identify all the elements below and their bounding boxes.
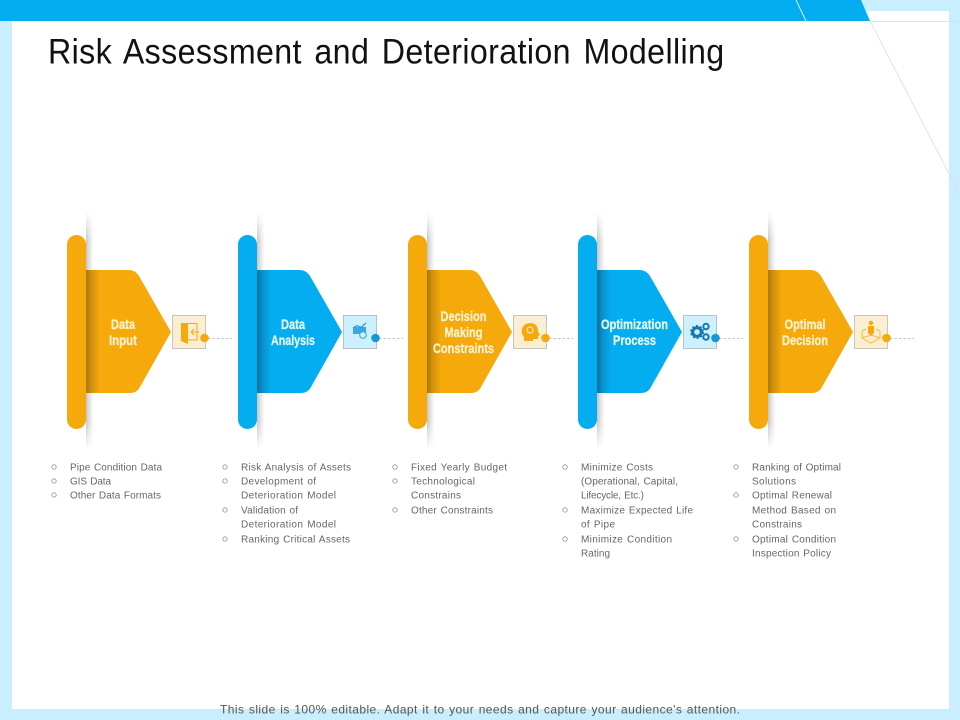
bullet list: optimization process: (Operational, Capital, [581, 476, 678, 488]
bullet list: decision making constraints: Other Constraints [411, 506, 493, 516]
bullet list: optimal decision: Optimal Renewal [752, 490, 832, 502]
footer note: This slide is 100% editable. Adapt it to your needs and capture your audience's attention. [220, 702, 740, 716]
bullet list: data input: Pipe Condition Data [70, 462, 162, 474]
bullet list: optimization process [563, 462, 693, 560]
bullet list: decision making constraints [393, 462, 507, 516]
bullet list: data analysis: Ranking Critical Assets [241, 534, 350, 546]
bullet list: optimization process: Rating [581, 548, 610, 560]
bullet list: optimal decision: Solutions [752, 476, 796, 488]
vertical bar [408, 235, 427, 429]
label: Constraints [433, 341, 494, 356]
label: Optimization [601, 317, 668, 332]
bullet list: optimal decision: Method Based on [752, 506, 836, 516]
bullet list: data analysis: Development of [241, 476, 316, 488]
vertical bar [578, 235, 597, 429]
bullet list: optimal decision [734, 462, 841, 560]
arrow shape: optimization [597, 270, 682, 393]
icon: chart analysis [344, 316, 376, 348]
step 4: optimization process [578, 212, 743, 450]
bullet list: decision making constraints: Fixed Yearly Budget [411, 462, 507, 474]
step 1: data input [67, 212, 232, 450]
label: Process [613, 333, 656, 348]
label: Data [281, 317, 305, 332]
bullet list: data analysis [223, 462, 351, 546]
label: Decision [440, 309, 486, 324]
header accent line [796, 0, 806, 21]
bullet list: data input: GIS Data [70, 476, 111, 488]
bullet list: optimization process: Minimize Costs [581, 462, 653, 474]
bullet list: data input: Other Data Formats [70, 490, 161, 502]
bullet list: data analysis: Deterioration Model [241, 520, 336, 530]
icon: head with gear [514, 316, 546, 348]
bullet list: optimization process: Lifecycle, Etc.) [581, 490, 644, 502]
bullet list: decision making constraints: Constrains [411, 490, 461, 502]
bullet list: optimization process: Minimize Condition [581, 534, 672, 546]
bullet list: data analysis: Deterioration Model [241, 490, 336, 502]
arrow shape: decision [427, 270, 512, 393]
icon: gears [684, 316, 716, 348]
arrow shape: data analysis [257, 270, 342, 393]
vertical bar [238, 235, 257, 429]
vertical bar [749, 235, 768, 429]
label: Making [444, 325, 482, 340]
connector [882, 334, 914, 342]
title: Risk Assessment and Deterioration Modelling [48, 33, 724, 72]
label: Analysis [271, 333, 315, 348]
top blue header band [0, 0, 870, 21]
header corner lines [869, 21, 960, 195]
connector [200, 334, 232, 342]
arrow shape: data input [86, 270, 171, 393]
connector [371, 334, 403, 342]
bullet list: decision making constraints: Technological [411, 476, 475, 488]
step 2: data analysis [238, 212, 403, 450]
connector [541, 334, 573, 342]
bullet list: data analysis: Risk Analysis of Assets [241, 462, 351, 474]
bullet list: data input [52, 462, 162, 502]
label: Data [111, 317, 135, 332]
vertical bar [67, 235, 86, 429]
label: Input [109, 333, 137, 348]
step 5: optimal decision [749, 212, 914, 450]
connector [711, 334, 743, 342]
bullet list: optimal decision: Optimal Condition [752, 534, 836, 546]
bullet list: optimal decision: Ranking of Optimal [752, 462, 841, 474]
label: Decision [782, 333, 828, 348]
bullet list: data analysis: Validation of [241, 506, 298, 516]
bullet list: optimal decision: Constrains [752, 520, 802, 530]
label: Optimal [784, 317, 826, 332]
bullet list: optimal decision: Inspection Policy [752, 548, 831, 560]
icon: door [172, 316, 206, 348]
icon: decision person [854, 316, 888, 348]
bullet list: optimization process: Maximize Expected Life [581, 506, 693, 516]
arrow shape: optimal decision [768, 270, 853, 393]
bullet list: optimization process: of Pipe [581, 520, 615, 530]
step 3: decision making constraints [408, 212, 573, 450]
